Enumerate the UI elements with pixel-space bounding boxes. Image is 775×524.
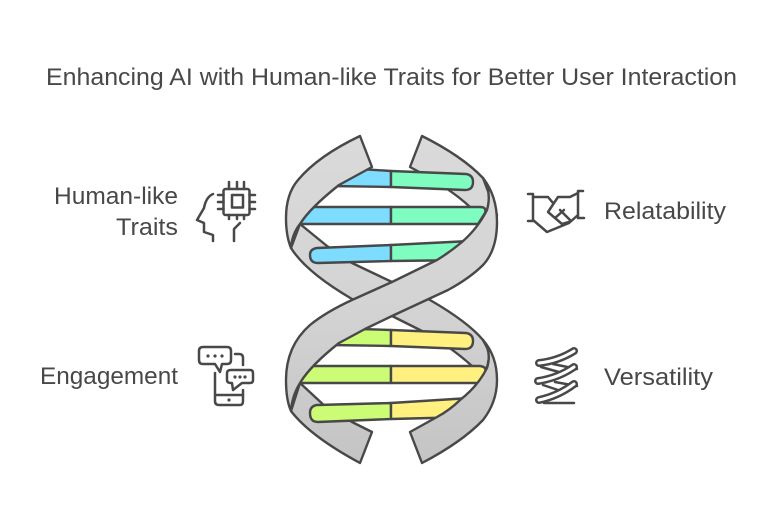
bar row 6: lime and yellow xyxy=(310,398,470,422)
icon: handshake xyxy=(528,191,584,232)
label: Engagement: Engagement xyxy=(40,363,178,390)
bar row 5: lime and yellow xyxy=(295,366,485,383)
spring coils xyxy=(538,351,574,400)
front strand: lower right xyxy=(410,340,497,463)
back strand: upper right xyxy=(410,136,497,250)
icon: phone with chat bubbles xyxy=(199,347,253,405)
icon: spring xyxy=(538,351,577,403)
bar row 2: blue and green xyxy=(295,207,485,224)
front strand: upper left xyxy=(286,136,372,248)
label: Human-like Traits: Human-like xyxy=(54,183,178,210)
label: Versatility: Versatility xyxy=(604,364,713,391)
back strand: middle crossing xyxy=(291,224,490,368)
label: Human-like Traits xyxy=(54,183,178,241)
DNA helix xyxy=(286,136,497,463)
back strand: lower left xyxy=(291,383,372,463)
bar row 3: blue and green xyxy=(310,241,470,263)
bar row 1: blue and green xyxy=(330,169,473,190)
label: Human-like Traits: Traits xyxy=(116,214,178,241)
icon: head with chip xyxy=(197,182,255,241)
spring connectors xyxy=(541,364,577,403)
front strand: middle crossing xyxy=(286,178,497,411)
label: Relatability: Relatability xyxy=(604,198,726,225)
title: Enhancing AI with Human-like Traits for Better User Interaction xyxy=(46,64,737,91)
bar row 4: lime and yellow xyxy=(330,329,473,349)
